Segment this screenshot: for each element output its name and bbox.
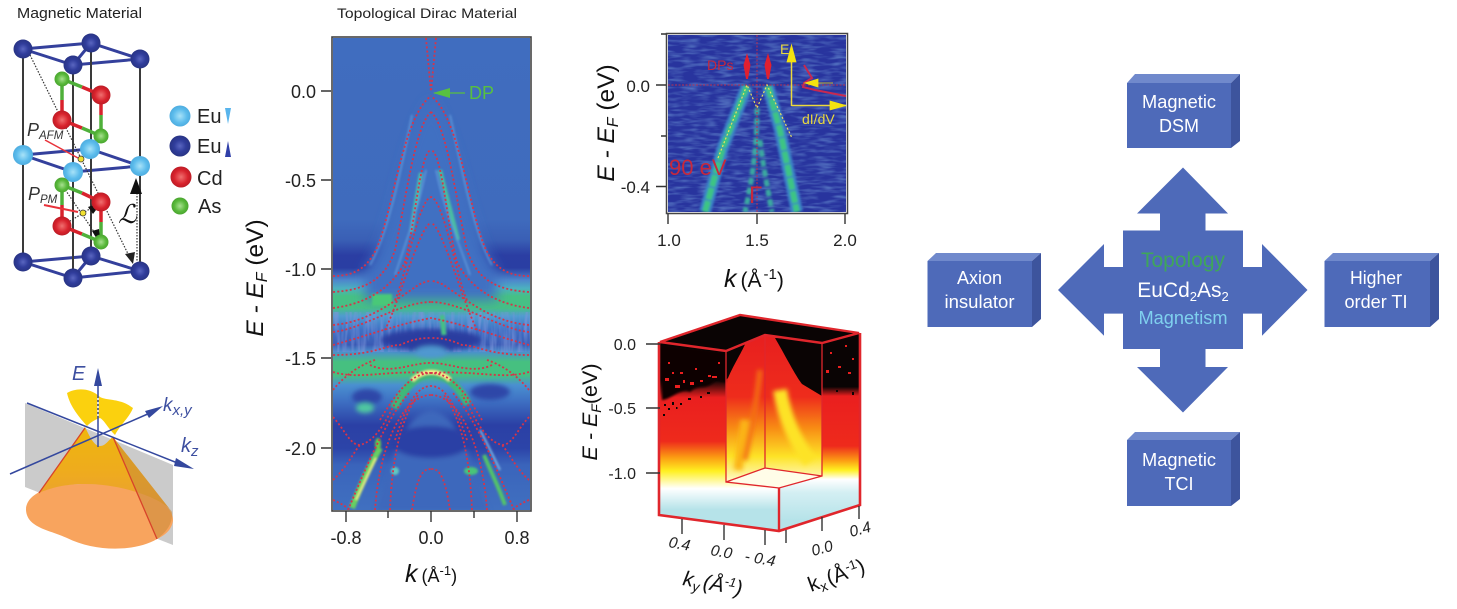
y tick labels — [285, 82, 316, 459]
red box edges — [659, 315, 860, 531]
speckles — [663, 375, 854, 416]
y axis title: E - E — [593, 127, 620, 182]
label: Gamma: Γ — [749, 182, 762, 209]
y tick labels: -0.4 — [621, 178, 650, 197]
inner faces — [726, 335, 822, 482]
ky axis title: ) — [730, 576, 744, 600]
inset label E: E — [780, 41, 789, 57]
y axis title: (eV) — [242, 219, 269, 272]
ky axis title: (Å — [701, 571, 726, 597]
DP arrows — [744, 53, 772, 79]
y axis title: E - E — [242, 282, 269, 337]
grey kz plane — [25, 403, 173, 545]
x tick labels — [657, 231, 857, 250]
y axis title: (eV) — [578, 364, 602, 404]
box: Magnetic DSM: DSM — [1159, 116, 1199, 136]
y axis title: E - E — [578, 412, 602, 460]
upper cone — [67, 389, 133, 435]
y axis title: F — [254, 271, 271, 282]
box: Magnetic TCI: Magnetic — [1142, 450, 1216, 470]
ky tick labels — [667, 534, 777, 570]
y tick labels: 0.0 — [291, 82, 316, 102]
ky axis title: -1 — [724, 573, 738, 590]
y tick labels — [621, 77, 650, 197]
label: k x,y: k — [163, 395, 172, 416]
label: E: E — [72, 363, 86, 385]
box: Higher order TI: order TI — [1344, 292, 1408, 312]
label: 90 eV: 90 eV — [669, 155, 727, 180]
box: Magnetic TCI — [1127, 432, 1240, 506]
kx axis title: k — [805, 571, 823, 597]
label: P AFM: AFM — [38, 130, 64, 142]
3D ARPES cube — [578, 315, 873, 602]
x axis title: ) — [451, 566, 457, 586]
y axis title: F — [588, 403, 604, 413]
top face — [660, 315, 859, 351]
x axis title: ) — [777, 269, 784, 292]
y tick labels — [608, 337, 636, 483]
box: Axion insulator: insulator — [944, 292, 1014, 312]
ARPES zoom heatmap — [593, 34, 857, 293]
y tick labels: -1.5 — [285, 349, 316, 369]
inset label dI/dV: dI/dV — [802, 111, 835, 127]
lower cone body — [39, 427, 172, 512]
axes — [10, 378, 185, 474]
box: Higher order TI: Higher — [1350, 268, 1402, 288]
ky axis title: k — [681, 567, 695, 592]
box: Magnetic DSM — [1127, 74, 1240, 148]
axis ticks — [646, 344, 859, 545]
y tick labels: -0.5 — [285, 171, 316, 191]
x tick labels: 2.0 — [833, 231, 857, 250]
y tick labels: -0.5 — [608, 401, 636, 418]
legend item: Eu spin up: Eu — [197, 136, 221, 158]
y axis title: F — [605, 116, 622, 127]
ky axis title: y — [690, 578, 702, 595]
x tick labels: -0.8 — [330, 528, 362, 548]
y tick labels: -1.0 — [608, 466, 636, 483]
label: k z: z — [190, 443, 199, 460]
box: Axion insulator: Axion — [957, 268, 1002, 288]
heading: Magnetic Material: Magnetic Material — [17, 6, 142, 22]
heading: Topological Dirac Material: Topological Dirac Material — [337, 5, 517, 21]
kx tick labels — [810, 519, 873, 560]
DP annotation — [433, 83, 494, 103]
ky tick labels: 0.0 — [709, 542, 734, 563]
plot frame — [666, 34, 848, 214]
label: Topology: Topology — [1141, 249, 1225, 272]
label: Magnetism: Magnetism — [1138, 308, 1228, 328]
kx axis title: x — [818, 578, 830, 595]
kx axis title: ) — [854, 555, 868, 579]
x tick labels: 1.0 — [657, 231, 681, 250]
x axis title: -1 — [440, 563, 451, 578]
atoms — [13, 34, 150, 288]
label: DPs: DPs — [707, 57, 733, 73]
x axis title: -1 — [764, 266, 777, 283]
legend item: Eu spin down: Eu — [197, 106, 221, 128]
lower cone base — [26, 484, 173, 549]
axis ticks — [656, 34, 845, 224]
kx tick labels: 0.4 — [848, 519, 873, 541]
y tick labels: -1.0 — [285, 260, 316, 280]
label: L: ℒ — [118, 199, 138, 229]
right face — [779, 333, 860, 530]
concept diagram — [928, 74, 1439, 506]
central four-way arrow — [1058, 168, 1308, 412]
band structure heatmap — [242, 37, 531, 588]
DP annotation: DP — [469, 83, 494, 103]
box: Magnetic DSM: Magnetic — [1142, 92, 1216, 112]
ky tick labels: 0.4 — [667, 534, 692, 555]
label: P PM: P — [28, 184, 40, 204]
x tick labels — [330, 528, 530, 548]
inset curve — [803, 65, 846, 96]
y axis title: (eV) — [593, 64, 620, 117]
left face — [659, 342, 779, 530]
x tick labels: 0.0 — [418, 528, 444, 548]
label: EuCd2As2: 2 — [1222, 289, 1229, 304]
floor — [726, 468, 822, 488]
legend: atom species — [170, 106, 231, 218]
ky tick labels: - 0.4 — [743, 548, 777, 570]
label: k z: k — [181, 435, 191, 457]
label: EuCd2As2: 2 — [1190, 289, 1197, 304]
kx tick labels: 0.0 — [810, 538, 835, 560]
x axis title: k(Å — [405, 560, 440, 588]
x axis title: k(Å — [724, 265, 762, 293]
legend item: As: As — [198, 196, 221, 218]
dotted lines and arrows — [30, 55, 137, 262]
label: k x,y: x,y — [172, 402, 193, 419]
x tick labels: 1.5 — [745, 231, 769, 250]
plot frame — [332, 37, 531, 511]
lattice bonds — [23, 43, 140, 278]
crystal structure diagram — [13, 34, 150, 288]
legend item: Cd: Cd — [197, 168, 223, 190]
y tick labels: -2.0 — [285, 439, 316, 459]
label: P AFM: P — [27, 120, 39, 140]
Dirac cone schematic — [10, 363, 199, 549]
box: Axion insulator — [928, 253, 1041, 327]
label: EuCd2As2: EuCd — [1137, 279, 1190, 302]
inset axes — [790, 62, 846, 106]
atom bonds — [62, 79, 101, 242]
kx axis title: (Å — [823, 561, 851, 590]
y axis ticks — [321, 91, 517, 522]
heatmap image — [333, 38, 530, 512]
y tick labels: 0.0 — [626, 77, 650, 96]
label: P PM: PM — [40, 194, 58, 206]
kx axis title: -1 — [843, 556, 859, 574]
y tick labels: 0.0 — [614, 337, 636, 354]
box: Higher order TI — [1324, 253, 1439, 327]
label: EuCd2As2: As — [1197, 279, 1222, 302]
heatmap image — [668, 35, 846, 212]
box: Magnetic TCI: TCI — [1164, 474, 1194, 494]
x tick labels: 0.8 — [504, 528, 530, 548]
